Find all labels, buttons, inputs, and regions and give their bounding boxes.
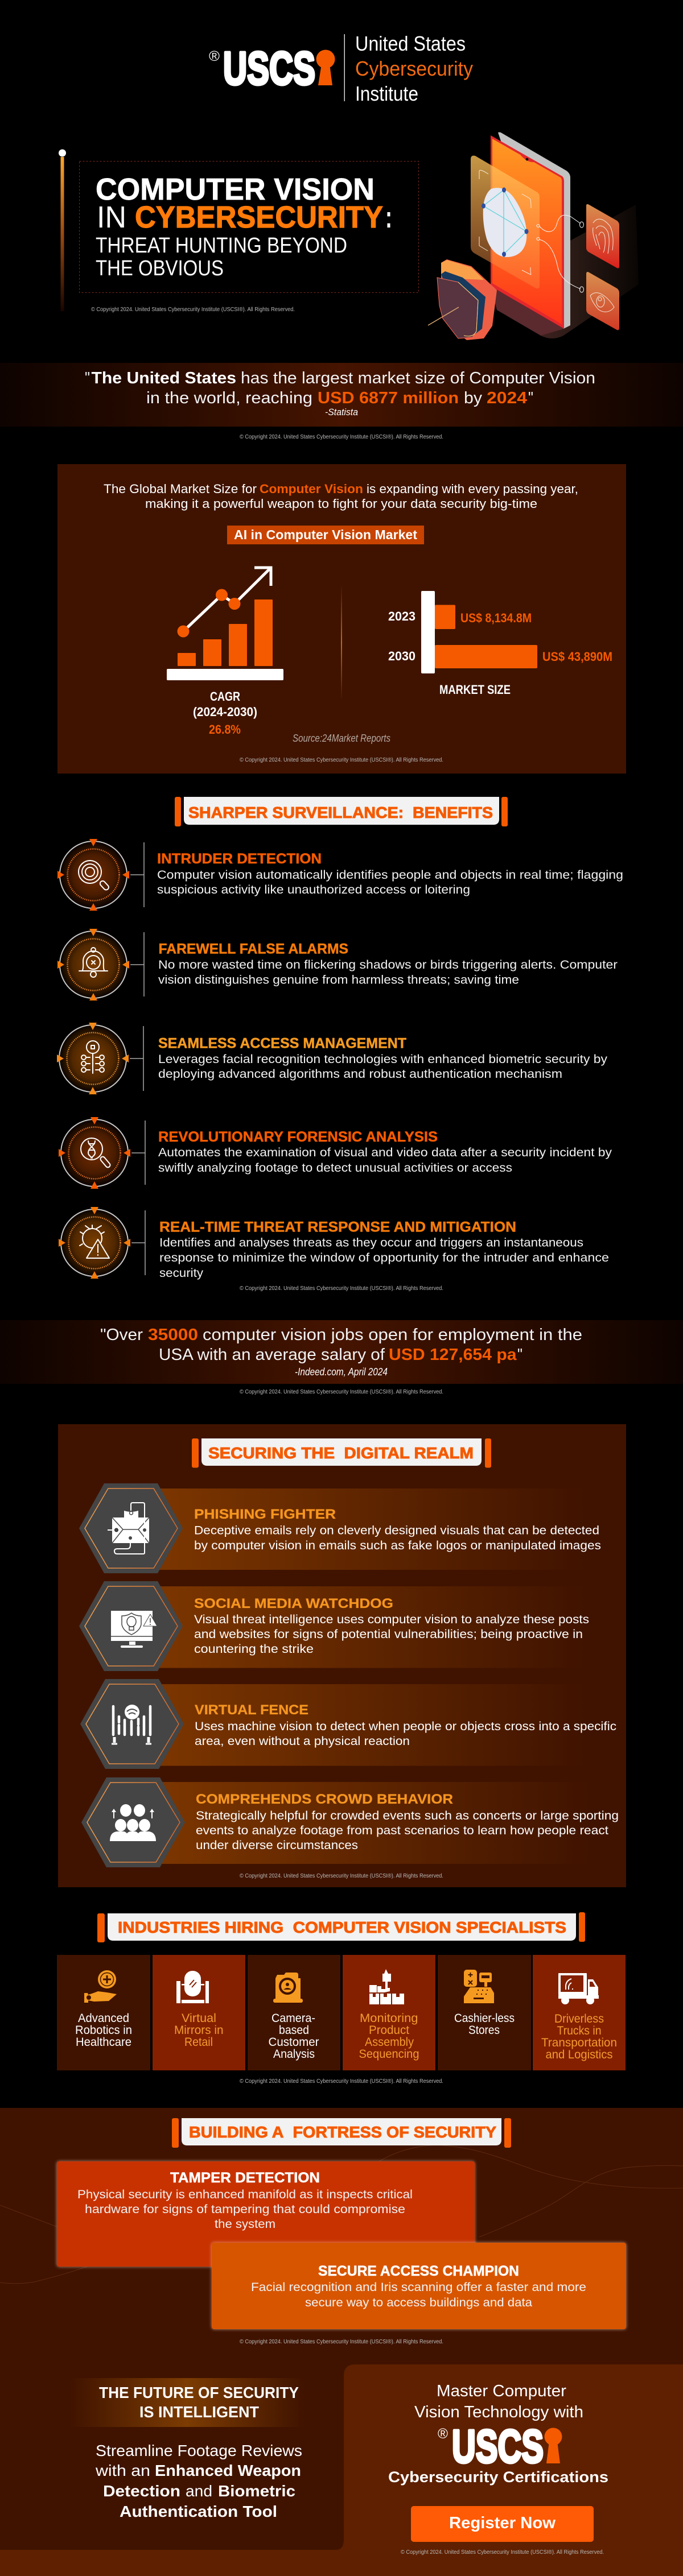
chart: market size bars: US$ 8,134.8M	[460, 611, 532, 625]
CAGR label: CAGR	[210, 689, 240, 704]
quote band: US market size: "	[85, 369, 90, 387]
CAGR label: (2024-2030)	[193, 705, 257, 719]
copyright: © Copyright 2024. United States Cybersecurity Institute (USCSI®). All Rights Reserved.	[240, 1389, 443, 1395]
logo: USCSI header: Cybersecurity	[355, 57, 473, 80]
card: advanced robotics	[57, 1955, 150, 2070]
benefit: intruder detection: Computer vision automatically identifies people and objects in real time; flagging	[157, 868, 623, 882]
row: social media watchdog: Visual threat intelligence uses computer vision to analyze these posts	[194, 1613, 589, 1626]
card: driverless trucks: and Logistics	[545, 2048, 612, 2061]
benefit: intruder detection: INTRUDER DETECTION	[157, 851, 322, 867]
row: comprehends crowd behavior: events to analyze footage from past scenarios to learn how people react	[196, 1824, 608, 1837]
icon: mirror	[176, 1971, 209, 2003]
card: advanced robotics: Robotics in	[75, 2024, 132, 2037]
icon: crowd	[110, 1804, 156, 1841]
benefit: real-time threat response: REAL-TIME THREAT RESPONSE AND MITIGATION	[159, 1219, 516, 1235]
card: virtual mirrors: Mirrors in	[174, 2024, 223, 2037]
card: virtual mirrors: Virtual	[182, 2012, 216, 2025]
row: virtual fence: area, even without a physical reaction	[195, 1735, 410, 1748]
row: comprehends crowd behavior: Strategically helpful for crowded events such as concerts or large sporting	[196, 1809, 619, 1822]
icon: connected truck	[558, 1973, 599, 2004]
row: social media watchdog: and websites for signs of potential vulnerabilities; being proactive in	[194, 1628, 583, 1641]
quote band: computer vision jobs: "Over	[100, 1326, 143, 1344]
row: phishing fighter: PHISHING FIGHTER	[194, 1507, 336, 1522]
panel: building a fortress background	[0, 2108, 683, 2576]
card: camera-based analysis: Camera-	[271, 2012, 315, 2025]
card: driverless trucks: Trucks in	[557, 2024, 601, 2037]
quote band: US market size: has the largest market size of Computer Vision	[241, 369, 595, 387]
card: secure access champion: Facial recognition and Iris scanning offer a faster and more	[251, 2280, 586, 2294]
heading: building a fortress: BUILDING A FORTRESS OF SECURITY	[189, 2123, 496, 2141]
quote band: US market size: 2024	[487, 389, 527, 407]
text: streamline footage reviews: Biometric	[218, 2482, 295, 2500]
card: tamper detection: hardware for signs of tampering that could compromise	[85, 2202, 405, 2216]
copyright: © Copyright 2024. United States Cybersecurity Institute (USCSI®). All Rights Reserved.	[240, 757, 443, 763]
CAGR label	[193, 689, 257, 737]
card: advanced robotics: Healthcare	[76, 2036, 131, 2049]
callout: the future of security: IS INTELLIGENT	[139, 2403, 259, 2421]
quote band: US market size: in the world, reaching	[146, 389, 312, 407]
title block: COMPUTER VISION	[96, 172, 375, 206]
card: camera-based analysis: Analysis	[273, 2048, 315, 2061]
card: secure access champion: SECURE ACCESS CHAMPION	[318, 2263, 519, 2279]
quote band: computer vision jobs: 35000	[148, 1326, 198, 1344]
intro text: making it a powerful weapon to fight for your data security big-time	[145, 497, 537, 511]
card: tamper detection: the system	[215, 2217, 275, 2231]
text: streamline footage reviews: Detection	[103, 2482, 180, 2500]
text: streamline footage reviews: and	[186, 2482, 212, 2500]
panel: global market size	[57, 464, 626, 774]
benefit: seamless access management	[57, 1023, 607, 1094]
logo: USCSI footer: USCS	[452, 2421, 544, 2472]
logo: USCSI header: Institute	[355, 82, 418, 105]
quote band: US market size: USD 6877 million	[318, 389, 459, 407]
card: camera-based analysis	[248, 1955, 340, 2070]
button: register now	[411, 2506, 594, 2542]
row: comprehends crowd behavior: COMPREHENDS CROWD BEHAVIOR	[196, 1792, 453, 1807]
icon: robot arm and boxes	[369, 1969, 404, 2004]
row: virtual fence: Uses machine vision to detect when people or objects cross into a specific	[195, 1720, 616, 1733]
icon: email shield	[108, 1503, 149, 1554]
heading: sharper surveillance	[175, 797, 508, 826]
benefit: farewell false alarms	[57, 929, 618, 1000]
card: cashier-less stores: Cashier-less	[454, 2012, 515, 2025]
icon: robotic hand with medical cross	[84, 1970, 117, 2003]
intro text: Computer Vision	[260, 482, 363, 496]
card: monitoring assembly: Product	[369, 2024, 409, 2037]
source: Source:24Market Reports	[293, 733, 390, 744]
title block: THE OBVIOUS	[96, 257, 224, 280]
quote band: US market size	[0, 363, 683, 427]
icon: cash register	[464, 1970, 494, 2003]
tag: AI in Computer Vision Market: AI in Computer Vision Market	[234, 527, 417, 542]
card: tamper detection: TAMPER DETECTION	[170, 2170, 320, 2186]
button: register now: Register Now	[449, 2514, 556, 2532]
benefit: seamless access management: SEAMLESS ACCESS MANAGEMENT	[158, 1035, 406, 1051]
icon: magnifier badge	[57, 839, 129, 911]
text: streamline footage reviews: with an	[95, 2462, 150, 2479]
icon: digital key badge	[57, 1023, 129, 1094]
card: virtual mirrors	[153, 1955, 245, 2070]
quote band: computer vision jobs: -Indeed.com, April 2024	[295, 1366, 388, 1378]
text: streamline footage reviews: Enhanced Weapon	[155, 2462, 301, 2479]
text: streamline footage reviews: Streamline Footage Reviews	[96, 2442, 302, 2459]
chart: market size bars	[388, 591, 612, 697]
card: cashier-less stores	[438, 1955, 531, 2070]
row: social media watchdog: SOCIAL MEDIA WATCHDOG	[194, 1596, 393, 1611]
accent line with dot	[59, 149, 66, 311]
card: driverless trucks	[533, 1955, 626, 2070]
heading: sharper surveillance: SHARPER SURVEILLANCE: BENEFITS	[188, 804, 493, 821]
text: master computer vision	[414, 2382, 583, 2421]
chart: market size bars: 2023	[388, 609, 415, 623]
quote band: computer vision jobs	[0, 1320, 683, 1384]
title block: IN	[97, 200, 126, 234]
chart: market size bars: 2030	[388, 649, 415, 663]
footer background shape	[0, 2364, 683, 2576]
quote band: US market size: by	[464, 389, 483, 407]
icon: bell badge	[57, 929, 129, 1000]
logo: USCSI header	[209, 32, 473, 105]
icon: camera target on laptop	[273, 1973, 303, 2003]
text: cybersecurity certifications: Cybersecurity Certifications	[388, 2469, 608, 2486]
copyright: © Copyright 2024. United States Cybersecurity Institute (USCSI®). All Rights Reserved.	[401, 2549, 604, 2556]
heading: securing the digital realm: SECURING THE DIGITAL REALM	[208, 1444, 474, 1462]
chart: market size bars: US$ 43,890M	[542, 650, 612, 664]
row: comprehends crowd behavior	[81, 1777, 619, 1867]
card: driverless trucks: Transportation	[541, 2036, 617, 2049]
benefit: revolutionary forensic analysis: swiftly analyzing footage to detect unusual activities or access	[158, 1161, 512, 1175]
benefit: revolutionary forensic analysis	[59, 1117, 612, 1189]
icon: DNA magnifier badge	[59, 1117, 130, 1189]
benefit: intruder detection: suspicious activity like unauthorized access or loitering	[157, 883, 470, 896]
logo: USCSI footer: ®	[438, 2426, 449, 2442]
intro text: The Global Market Size for	[104, 482, 257, 496]
callout: the future of security: THE FUTURE OF SECURITY	[99, 2384, 299, 2401]
card: virtual mirrors: Retail	[184, 2036, 213, 2049]
heading: industries hiring	[97, 1912, 585, 1942]
row: social media watchdog: countering the strike	[194, 1643, 314, 1656]
benefit: real-time threat response: response to minimize the window of opportunity for the intruder and enhance	[159, 1251, 609, 1264]
card: advanced robotics: Advanced	[78, 2012, 129, 2025]
icon: monitor with shield and warning	[111, 1611, 157, 1648]
quote band: US market size: "	[528, 389, 533, 407]
row: phishing fighter: Deceptive emails rely on cleverly designed visuals that can be detected	[194, 1524, 599, 1537]
benefit: farewell false alarms: FAREWELL FALSE ALARMS	[158, 941, 348, 957]
benefit: farewell false alarms: vision distinguishes genuine from harmless threats; saving time	[158, 973, 519, 986]
card: secure access champion: secure way to access buildings and data	[305, 2296, 532, 2309]
chart: CAGR growth bars and arrow	[167, 568, 283, 680]
row: social media watchdog	[79, 1581, 589, 1671]
title block: CYBERSECURITY	[135, 200, 383, 234]
callout: the future of security	[69, 2378, 305, 2427]
quote band: computer vision jobs: computer vision jobs open for employment in the	[203, 1326, 582, 1344]
row: virtual fence: VIRTUAL FENCE	[195, 1702, 308, 1718]
copyright: © Copyright 2024. United States Cybersecurity Institute (USCSI®). All Rights Reserved.	[240, 1873, 443, 1879]
benefit: seamless access management: Leverages facial recognition technologies with enhanced biometric security by	[158, 1052, 607, 1066]
copyright: © Copyright 2024. United States Cybersecurity Institute (USCSI®). All Rights Reserved.	[240, 2339, 443, 2345]
logo: USCSI header: ®	[209, 48, 220, 64]
copyright: © Copyright 2024. United States Cybersecurity Institute (USCSI®). All Rights Reserved.	[91, 307, 295, 313]
intro text	[104, 482, 578, 511]
benefit: seamless access management: deploying advanced algorithms and robust authentication mechanism	[158, 1067, 562, 1081]
icon: virus and warning badge	[59, 1207, 130, 1279]
logo: USCSI header: USCS	[223, 43, 315, 94]
benefit: farewell false alarms: No more wasted time on flickering shadows or birds triggering alerts. Computer	[158, 958, 618, 971]
row: comprehends crowd behavior: under diverse circumstances	[196, 1839, 358, 1852]
hero illustration: tablet, biometrics and shield	[428, 132, 639, 340]
copyright: © Copyright 2024. United States Cybersecurity Institute (USCSI®). All Rights Reserved.	[240, 2078, 443, 2085]
text: streamline footage reviews	[95, 2442, 302, 2520]
quote band: US market size: The United States	[91, 369, 236, 387]
title block: :	[385, 200, 392, 234]
copyright: © Copyright 2024. United States Cybersecurity Institute (USCSI®). All Rights Reserved.	[240, 434, 443, 440]
copyright: © Copyright 2024. United States Cybersecurity Institute (USCSI®). All Rights Reserved.	[240, 1285, 443, 1292]
card: driverless trucks: Driverless	[554, 2012, 604, 2025]
benefit: real-time threat response: Identifies and analyses threats as they occur and triggers an instantaneous	[159, 1235, 583, 1249]
row: phishing fighter: by computer vision in emails such as fake logos or manipulated images	[194, 1539, 601, 1552]
benefit: real-time threat response: security	[159, 1266, 203, 1280]
panel: securing the digital realm	[58, 1424, 626, 1887]
card: tamper detection: Physical security is enhanced manifold as it inspects critical	[77, 2188, 413, 2201]
card: monitoring assembly: Assembly	[365, 2036, 414, 2049]
card: monitoring assembly: Sequencing	[359, 2048, 419, 2061]
benefit: intruder detection	[57, 839, 623, 911]
card: camera-based analysis: Customer	[269, 2036, 319, 2049]
benefit: revolutionary forensic analysis: Automates the examination of visual and video data after a security incident by	[158, 1146, 612, 1159]
card: cashier-less stores: Stores	[468, 2024, 500, 2037]
logo: USCSI header: United States	[355, 32, 466, 55]
text: master computer vision: Vision Technology with	[414, 2403, 583, 2421]
quote band: computer vision jobs: USA with an average salary of	[159, 1346, 385, 1364]
heading: securing the digital realm	[192, 1438, 491, 1467]
icon: virtual fence	[112, 1705, 151, 1744]
row: phishing fighter	[79, 1483, 601, 1573]
quote band: US market size: -Statista	[325, 407, 358, 417]
card: monitoring assembly: Monitoring	[360, 2012, 418, 2025]
chart: market size bars: MARKET SIZE	[439, 683, 511, 697]
heading: industries hiring: INDUSTRIES HIRING COMPUTER VISION SPECIALISTS	[118, 1918, 566, 1936]
quote band: computer vision jobs: USD 127,654 pa	[389, 1346, 517, 1364]
benefit: real-time threat response	[59, 1207, 609, 1280]
heading: building a fortress	[172, 2118, 511, 2148]
card: secure access champion	[212, 2243, 626, 2329]
text: streamline footage reviews: Authentication Tool	[120, 2503, 277, 2520]
card: tamper detection	[57, 2161, 475, 2267]
benefit: revolutionary forensic analysis: REVOLUTIONARY FORENSIC ANALYSIS	[158, 1129, 438, 1145]
row: virtual fence	[80, 1679, 616, 1769]
intro text: is expanding with every passing year,	[367, 482, 578, 496]
title block: THREAT HUNTING BEYOND	[96, 234, 347, 258]
card: monitoring assembly	[343, 1955, 435, 2070]
title block	[80, 162, 419, 292]
text: master computer vision: Master Computer	[437, 2382, 566, 2400]
CAGR label: 26.8%	[209, 722, 241, 737]
quote band: computer vision jobs: "	[517, 1346, 522, 1364]
card: camera-based analysis: based	[279, 2024, 309, 2037]
